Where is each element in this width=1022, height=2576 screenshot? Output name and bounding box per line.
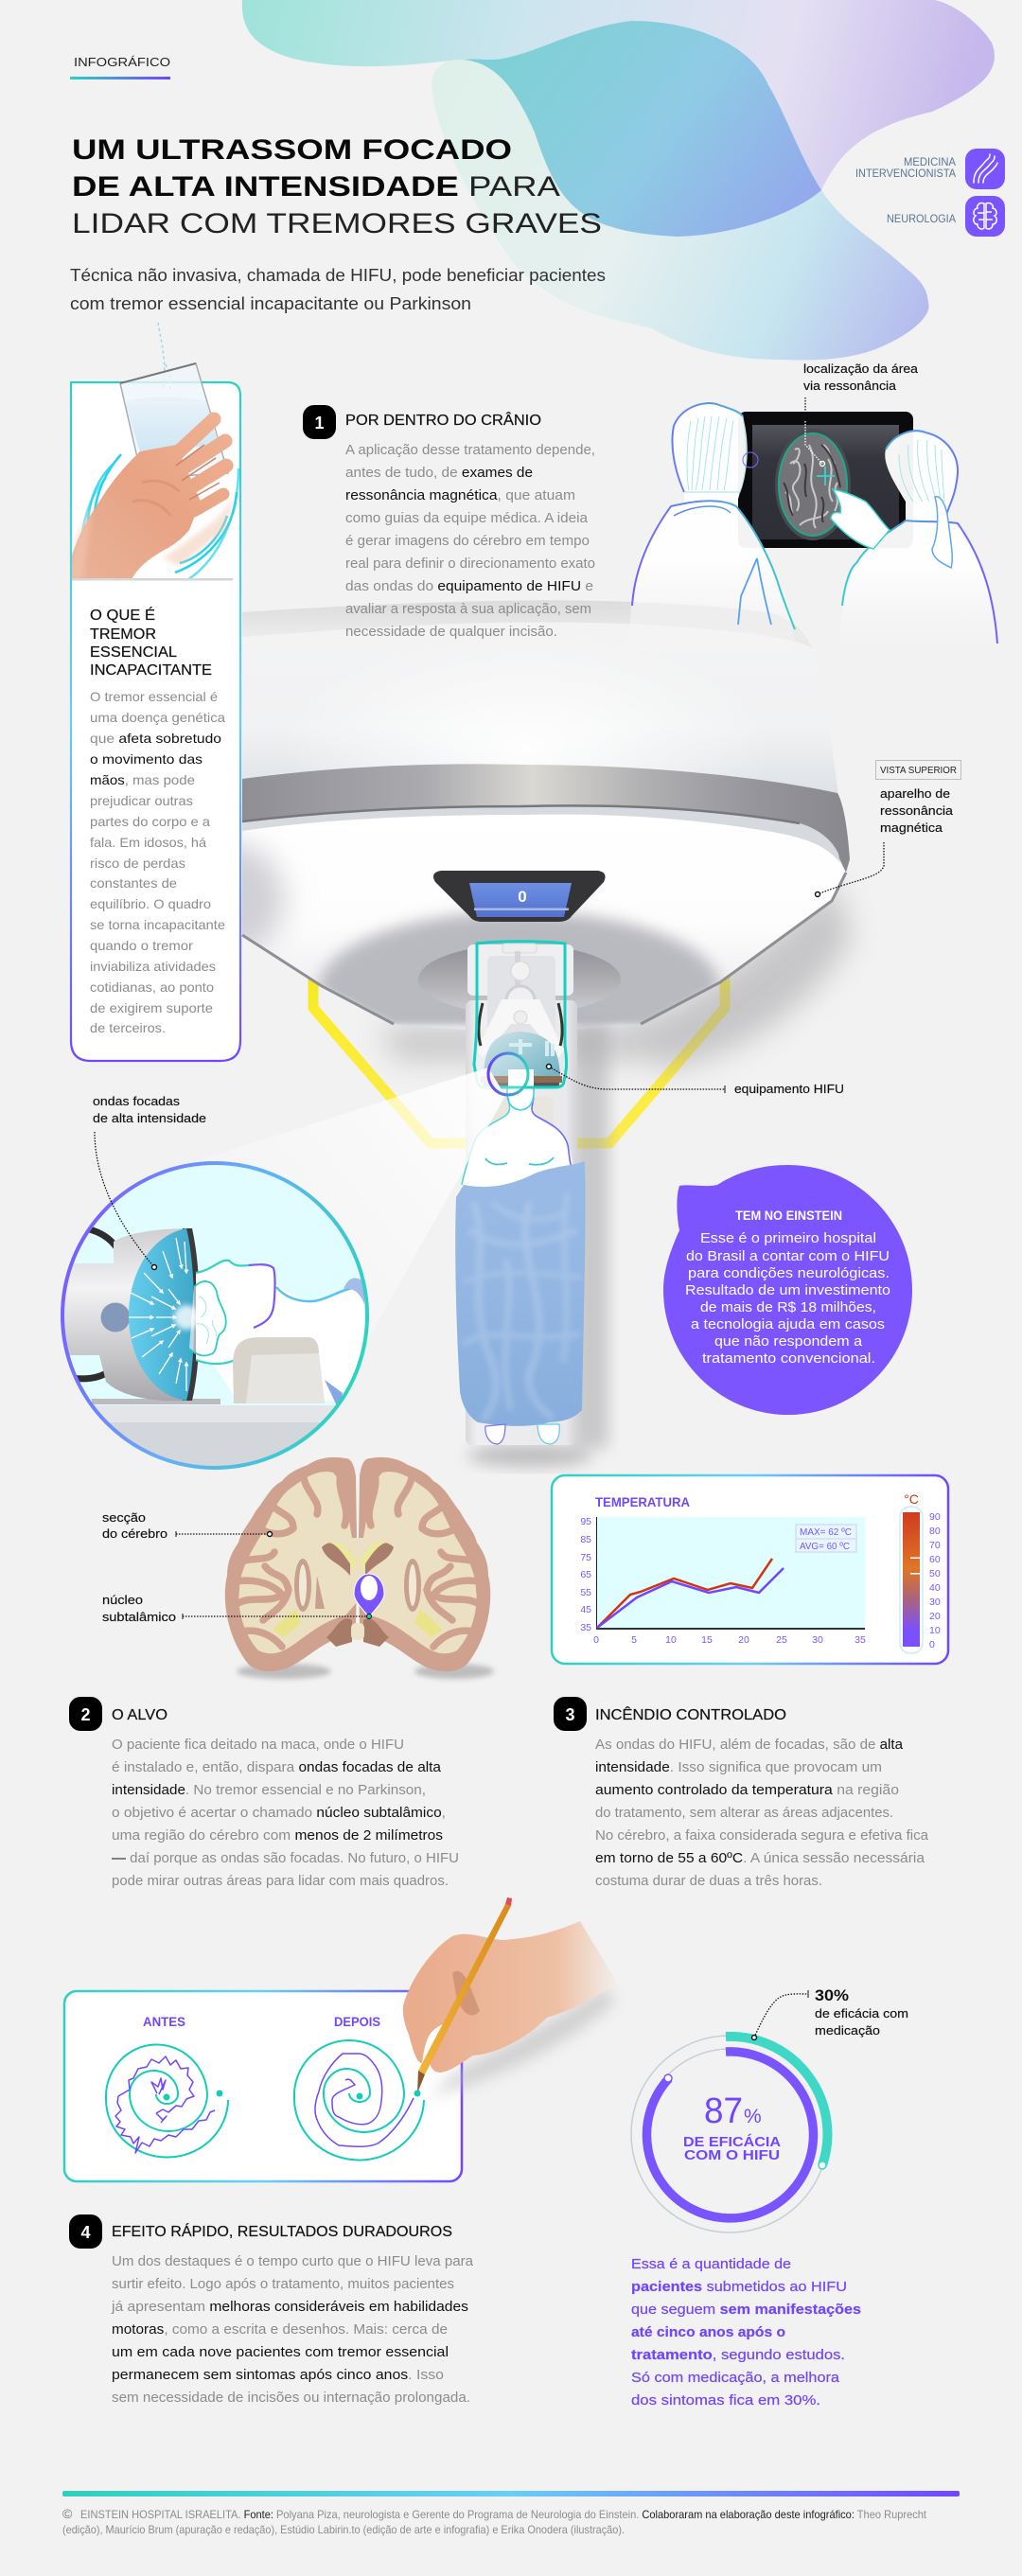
panel body text: que afeta sobretudo bbox=[90, 731, 221, 746]
efficacy ring chart: DE EFICÁCIA bbox=[683, 2134, 782, 2150]
panel body text: de terceiros. bbox=[90, 1020, 166, 1035]
patient body bbox=[462, 1069, 577, 1188]
line chart: 25 bbox=[776, 1634, 787, 1646]
patient table bbox=[466, 944, 577, 1445]
section 2: o alvo: pode mirar outras áreas para lidar com mais quadros. bbox=[112, 1873, 449, 1889]
subtitle: Técnica não invasiva, chamada de HIFU, pode beneficiar pacientes bbox=[70, 266, 606, 285]
right doctor bbox=[831, 431, 998, 658]
pencil bbox=[417, 1897, 512, 2093]
section 3: incêndio controlado: em torno de 55 a 60ºC . A única sessão necessária bbox=[595, 1850, 925, 1866]
label: 30% eficácia com medicação bbox=[751, 1986, 908, 2040]
section 1: por dentro do crânio: das ondas do equipamento de HIFU e bbox=[345, 578, 593, 594]
line chart: AVG= 60 ºC bbox=[800, 1541, 850, 1552]
magnified circle: transducer bbox=[57, 1163, 379, 1479]
section 1: por dentro do crânio: ressonância magnética , que atuam bbox=[345, 487, 575, 503]
efficacy ring chart bbox=[631, 2036, 828, 2232]
label: vista superior: magnética bbox=[880, 820, 943, 835]
line chart: 75 bbox=[580, 1552, 591, 1563]
left doctor bbox=[629, 403, 797, 662]
section 4: efeito rápido: motoras, como a escrita e desenhos. Mais: cerca de bbox=[112, 2321, 448, 2338]
section 4: efeito rápido: Um dos destaques é o tempo curto que o HIFU leva para bbox=[112, 2253, 474, 2269]
thermometer scale: 70 bbox=[929, 1540, 941, 1551]
section 2: o alvo: O ALVO bbox=[112, 1707, 167, 1723]
illustration: hand with pencil bbox=[403, 1897, 617, 2097]
line chart: 65 bbox=[580, 1569, 591, 1580]
HIFU teal frame bbox=[474, 942, 567, 1087]
label: ondas focadas: de alta intensidade bbox=[93, 1111, 206, 1125]
thermometer scale: 0 bbox=[929, 1639, 935, 1650]
thermometer scale: 30 bbox=[929, 1597, 941, 1608]
section 1: por dentro do crânio bbox=[303, 405, 595, 640]
section 2: o alvo: — daí porque as ondas são focadas. No futuro, o HIFU bbox=[112, 1850, 459, 1866]
panel body text: uma doença genética bbox=[90, 710, 225, 725]
section 3: incêndio controlado: INCÊNDIO CONTROLADO bbox=[595, 1705, 786, 1723]
badge 3: 3 bbox=[565, 1705, 575, 1724]
head bbox=[196, 1261, 275, 1365]
thermometer scale: 40 bbox=[929, 1582, 941, 1594]
label: núcleo subtalâmico bbox=[102, 1593, 366, 1624]
machine metal band bbox=[242, 764, 850, 873]
section 3: incêndio controlado: costuma durar de duas a três horas. bbox=[595, 1873, 822, 1889]
efficacy explanation text bbox=[631, 2256, 861, 2408]
efficacy ring chart: % bbox=[744, 2106, 762, 2127]
label: localização da área bbox=[803, 362, 919, 466]
section 1: por dentro do crânio: POR DENTRO DO CRÂNIO bbox=[345, 411, 541, 429]
panel body text: de exigirem suporte bbox=[90, 1000, 213, 1015]
label: núcleo subtalâmico: subtalâmico bbox=[102, 1610, 176, 1624]
machine bore bbox=[418, 949, 621, 1009]
icon: neurologia bbox=[965, 196, 1005, 237]
panel body text: mãos, mas pode bbox=[90, 772, 195, 787]
thermometer scale bbox=[900, 1491, 941, 1653]
title: DE ALTA INTENSIDADE PARA bbox=[72, 171, 560, 203]
section 1: por dentro do crânio: real para definir o direcionamento exato bbox=[345, 556, 595, 572]
callout: tem no einstein: Resultado de um investimento bbox=[685, 1282, 890, 1298]
MRI machine top view bbox=[170, 600, 852, 1069]
line chart: 15 bbox=[701, 1634, 713, 1646]
panel body text: partes do corpo e a bbox=[90, 814, 210, 829]
section 3: incêndio controlado: No cérebro, a faixa considerada segura e efetiva fica bbox=[595, 1827, 929, 1844]
panel body text: quando o tremor bbox=[90, 938, 193, 953]
panel body text: fala. Em idosos, há bbox=[90, 835, 206, 850]
category tags: NEUROLOGIA bbox=[887, 214, 956, 225]
label: vista superior: aparelho de bbox=[880, 786, 950, 801]
ultrasound arrows bbox=[129, 1238, 186, 1391]
label: 30% eficácia com medicação: de eficácia com bbox=[815, 2006, 908, 2020]
panel body text: cotidianas, ao ponto bbox=[90, 979, 214, 995]
panel heading: O QUE É bbox=[90, 606, 155, 624]
section 4: efeito rápido: já apresentam melhoras consideráveis em habilidades bbox=[111, 2299, 468, 2315]
label: ondas focadas: ondas focadas bbox=[93, 1094, 181, 1108]
efficacy explanation text: tratamento , segundo estudos. bbox=[631, 2347, 845, 2363]
line chart: MAX= 62 ºC bbox=[800, 1526, 852, 1538]
machine white dome bbox=[241, 814, 848, 1030]
panel body text: constantes de bbox=[90, 875, 177, 891]
line chart: 0 bbox=[593, 1634, 599, 1646]
label: vista superior bbox=[816, 761, 961, 897]
panel body text bbox=[90, 689, 225, 1035]
subtitle: com tremor essencial incapacitante ou Parkinson bbox=[70, 294, 471, 313]
icon: medicina intervencionista bbox=[965, 149, 1005, 189]
illustration: trembling hand with glass bbox=[72, 322, 240, 581]
callout: tem no einstein: para condições neurológicas. bbox=[688, 1265, 890, 1281]
panel body text: equilíbrio. O quadro bbox=[90, 896, 211, 911]
dome edge bbox=[183, 1228, 199, 1401]
panel heading: ESSENCIAL bbox=[90, 644, 177, 661]
right hemisphere bbox=[358, 1457, 490, 1671]
section 1: por dentro do crânio: A aplicação desse tratamento depende, bbox=[345, 442, 595, 458]
panel: temperature chart bbox=[552, 1475, 948, 1664]
mri brain scan bbox=[775, 429, 851, 540]
machine display bbox=[433, 871, 606, 922]
label: núcleo subtalâmico: núcleo bbox=[102, 1593, 143, 1607]
efficacy explanation text: pacientes submetidos ao HIFU bbox=[631, 2279, 847, 2295]
machine display: 0 bbox=[518, 888, 527, 906]
section 3: incêndio controlado: aumento controlado da temperatura na região bbox=[595, 1782, 899, 1798]
line chart: 20 bbox=[738, 1634, 749, 1646]
illustration: brain coronal section bbox=[225, 1457, 494, 1679]
section 1: por dentro do crânio: avaliar a resposta à sua aplicação, sem bbox=[345, 601, 591, 617]
pin bbox=[354, 1574, 384, 1618]
callout: tem no einstein: tratamento convencional. bbox=[702, 1350, 875, 1367]
section 4: efeito rápido: EFEITO RÁPIDO, RESULTADOS DURADOUROS bbox=[112, 2222, 452, 2240]
eyebrow: infográfico bbox=[70, 55, 170, 79]
badge 4: 4 bbox=[80, 2223, 91, 2242]
feet bbox=[485, 1424, 559, 1444]
section 3: incêndio controlado: As ondas do HIFU, além de focadas, são de alta bbox=[595, 1737, 904, 1753]
category tags: MEDICINA bbox=[904, 157, 956, 168]
section 4: efeito rápido: permanecem sem sintomas após cinco anos . Isso bbox=[112, 2367, 444, 2383]
section 3: incêndio controlado: do tratamento, sem alterar as áreas adjacentes. bbox=[595, 1805, 893, 1821]
efficacy ring chart: 87 bbox=[704, 2091, 743, 2131]
efficacy explanation text: até cinco anos após o bbox=[631, 2324, 785, 2340]
category tags: INTERVENCIONISTA bbox=[855, 168, 956, 180]
section 2: o alvo: uma região do cérebro com menos de 2 milímetros bbox=[112, 1827, 443, 1844]
thermometer scale: °C bbox=[904, 1491, 919, 1507]
line chart: 45 bbox=[580, 1604, 591, 1615]
panel heading: TREMOR bbox=[90, 626, 156, 643]
machine top shell bbox=[242, 600, 838, 795]
label: secção do cérebro: secção bbox=[102, 1510, 146, 1525]
panel body text: se torna incapacitante bbox=[90, 917, 225, 932]
thermometer scale: 50 bbox=[929, 1568, 941, 1579]
section 2: o alvo bbox=[69, 1697, 459, 1889]
efficacy ring chart: COM O HIFU bbox=[684, 2148, 780, 2163]
title bbox=[72, 134, 602, 239]
section 2: o alvo: é instalado e, então, dispara ondas focadas de alta bbox=[112, 1759, 442, 1775]
panel heading: INCAPACITANTE bbox=[90, 662, 212, 679]
table shadow bbox=[467, 1022, 608, 1467]
efficacy explanation text: Só com medicação, a melhora bbox=[631, 2370, 840, 2386]
section 4: efeito rápido: um em cada nove pacientes com tremor essencial bbox=[112, 2344, 449, 2360]
footer credits bbox=[62, 2506, 927, 2536]
category tags bbox=[855, 149, 1005, 237]
label: localização da área: localização da área bbox=[803, 362, 919, 376]
line chart: 35 bbox=[855, 1634, 866, 1646]
label: equipamento HIFU bbox=[547, 1064, 844, 1096]
panel body text: o movimento das bbox=[90, 751, 203, 767]
line chart: 35 bbox=[580, 1622, 591, 1633]
antes spiral: ANTES bbox=[143, 2014, 185, 2029]
label: localização da área: via ressonância bbox=[803, 379, 897, 393]
section 2: o alvo: intensidade. No tremor essencial e no Parkinson, bbox=[112, 1782, 426, 1798]
tablet bbox=[738, 412, 913, 548]
footer bar bbox=[62, 2491, 960, 2497]
HIFU equipment bbox=[477, 944, 564, 1087]
efficacy explanation text: que seguem sem manifestações bbox=[631, 2302, 861, 2318]
callout: tem no einstein: a tecnologia ajuda em casos bbox=[691, 1316, 885, 1332]
label: equipamento HIFU: equipamento HIFU bbox=[734, 1082, 844, 1096]
badge 2 bbox=[69, 1697, 102, 1731]
thermometer scale: 90 bbox=[929, 1511, 941, 1523]
badge 2: 2 bbox=[80, 1705, 91, 1724]
panel: temperature chart: TEMPERATURA bbox=[595, 1494, 690, 1509]
line chart: 85 bbox=[580, 1534, 591, 1545]
device housing bbox=[57, 1228, 189, 1401]
section 4: efeito rápido: surtir efeito. Logo após o tratamento, muitos pacientes bbox=[112, 2276, 454, 2292]
section 3: incêndio controlado bbox=[554, 1697, 929, 1889]
left hemisphere bbox=[225, 1457, 358, 1671]
panel body text: risco de perdas bbox=[90, 856, 185, 871]
callout: tem no einstein: de mais de R$ 18 milhões, bbox=[700, 1299, 876, 1315]
section 1: por dentro do crânio: necessidade de qualquer incisão. bbox=[345, 624, 557, 640]
footer credits: © bbox=[62, 2506, 73, 2521]
section 1: por dentro do crânio: é gerar imagens do cérebro em tempo bbox=[345, 533, 590, 549]
callout: tem no einstein: TEM NO EINSTEIN bbox=[735, 1208, 842, 1223]
subtitle bbox=[70, 266, 606, 313]
small focus ring bbox=[488, 1053, 528, 1095]
line chart: 30 bbox=[812, 1634, 823, 1646]
yellow hexagon frame bbox=[313, 975, 725, 1143]
torso bbox=[214, 1284, 365, 1401]
illustration: doctors viewing MRI tablet bbox=[629, 403, 998, 662]
white focus ray bbox=[196, 1067, 505, 1344]
panel: o que é tremor essencial bbox=[66, 323, 240, 1061]
panel body text: inviabiliza atividades bbox=[90, 959, 216, 974]
glass bbox=[120, 363, 228, 478]
thermometer scale: 60 bbox=[929, 1554, 941, 1565]
floor bbox=[95, 1405, 335, 1422]
badge 4 bbox=[69, 2214, 102, 2249]
panel heading bbox=[90, 606, 212, 679]
pillow bbox=[491, 1096, 554, 1156]
efficacy explanation text: Essa é a quantidade de bbox=[631, 2256, 791, 2272]
label: 30% eficácia com medicação: 30% bbox=[815, 1986, 849, 2004]
depois spiral bbox=[294, 2014, 424, 2160]
line chart: 5 bbox=[631, 1634, 637, 1646]
callout: tem no einstein: que não respondem a bbox=[714, 1333, 863, 1350]
callout: tem no einstein bbox=[663, 1165, 912, 1415]
section 2: o alvo: o objetivo é acertar o chamado núcleo subtalâmico , bbox=[112, 1805, 446, 1821]
panel body text: O tremor essencial é bbox=[90, 689, 218, 704]
title: UM ULTRASSOM FOCADO bbox=[72, 134, 512, 166]
section 2: o alvo: O paciente fica deitado na maca, onde o HIFU bbox=[112, 1737, 404, 1753]
section 1: por dentro do crânio: como guias da equipe médica. A ideia bbox=[345, 510, 589, 526]
callout: tem no einstein: do Brasil a contar com o HIFU bbox=[686, 1248, 890, 1264]
label: secção do cérebro: do cérebro bbox=[102, 1526, 167, 1541]
thermometer scale: 10 bbox=[929, 1625, 941, 1636]
eyebrow: infográfico: INFOGRÁFICO bbox=[74, 55, 170, 69]
line chart: 55 bbox=[580, 1587, 591, 1598]
thermometer scale: 20 bbox=[929, 1611, 941, 1622]
label: vista superior: ressonância bbox=[880, 803, 954, 818]
line chart bbox=[580, 1516, 866, 1646]
badge 3 bbox=[554, 1697, 587, 1731]
line chart: 95 bbox=[580, 1516, 591, 1527]
brain in head bbox=[189, 1281, 226, 1355]
badge 1 bbox=[303, 405, 336, 439]
label: ondas focadas bbox=[93, 1094, 206, 1270]
section 4: efeito rápido bbox=[69, 2214, 474, 2406]
label: vista superior: VISTA SUPERIOR bbox=[880, 766, 957, 776]
antes spiral bbox=[106, 2014, 228, 2157]
footer credits: (edição), Maurício Brum (apuração e redação), Estúdio Labirin.to (edição de arte e infografia) e Erika Onodera (ilustração). bbox=[62, 2523, 625, 2536]
blue blanket bbox=[455, 1161, 586, 1426]
section 1: por dentro do crânio: antes de tudo, de exames de bbox=[345, 465, 533, 481]
depois spiral: DEPOIS bbox=[334, 2014, 380, 2029]
panel body text: prejudicar outras bbox=[90, 793, 193, 808]
pillow bbox=[233, 1337, 325, 1403]
section 3: incêndio controlado: intensidade. Isso significa que provocam um bbox=[595, 1759, 882, 1775]
callout: tem no einstein: Esse é o primeiro hospital bbox=[700, 1230, 876, 1246]
hand bbox=[72, 413, 236, 578]
efficacy explanation text: dos sintomas fica em 30%. bbox=[631, 2392, 820, 2408]
thermometer scale: 80 bbox=[929, 1526, 941, 1537]
title: LIDAR COM TREMORES GRAVES bbox=[72, 208, 602, 239]
machine shadow bbox=[379, 880, 852, 1069]
pointing hand bbox=[831, 489, 890, 549]
line chart: 10 bbox=[665, 1634, 677, 1646]
section 4: efeito rápido: sem necessidade de incisões ou internação prolongada. bbox=[112, 2390, 470, 2406]
panel: antes e depois spirals bbox=[64, 1991, 462, 2181]
water splash bbox=[158, 323, 171, 390]
footer credits: EINSTEIN HOSPITAL ISRAELITA. Fonte: Polyana Piza, neurologista e Gerente do Programa de Neurologia do Einstein. Colaboraram na elaboração deste infográfico: Theo Ruprecht bbox=[80, 2508, 927, 2521]
label: 30% eficácia com medicação: medicação bbox=[815, 2023, 880, 2038]
badge 1: 1 bbox=[314, 414, 325, 432]
hoses bbox=[77, 1226, 115, 1382]
background blobs bbox=[242, 0, 995, 360]
label: secção do cérebro bbox=[102, 1510, 273, 1541]
